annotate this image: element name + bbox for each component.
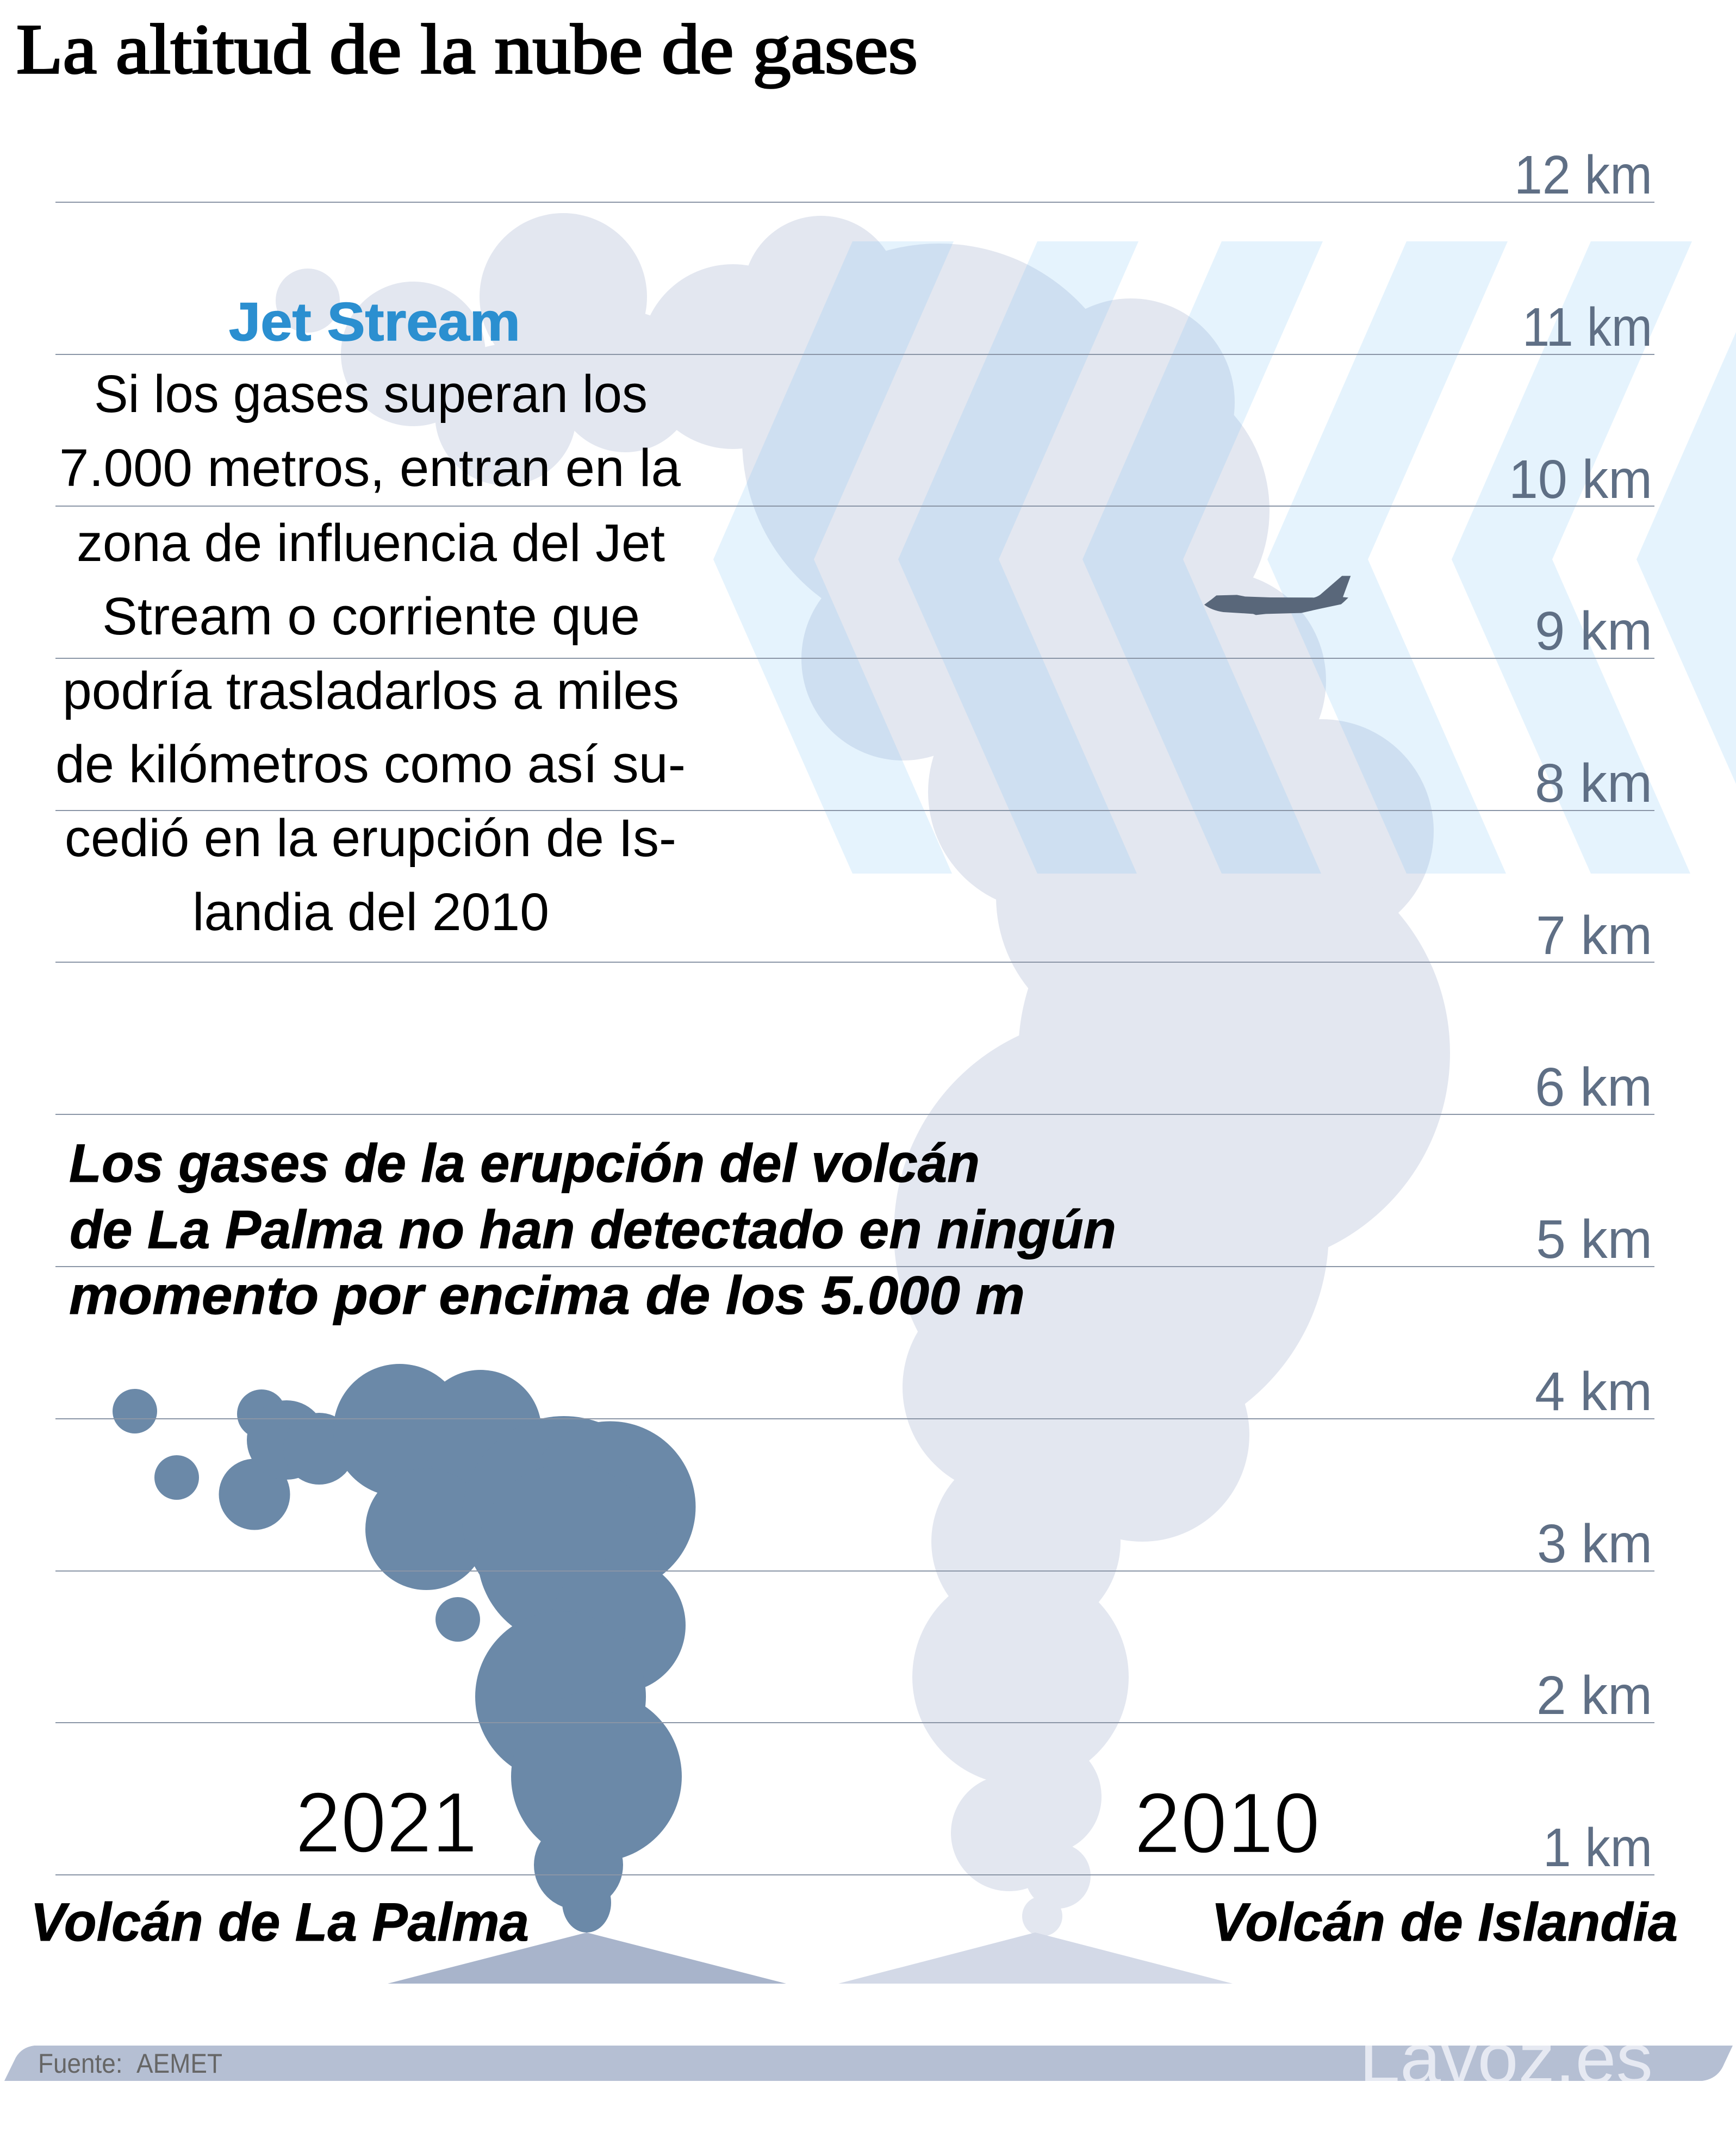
callout: La Palma gases: momento por encima de los 5.000 m xyxy=(69,1265,1025,1325)
year label 2010: 2010 xyxy=(1134,1775,1320,1871)
2021 La Palma volcano gas cloud xyxy=(113,1364,696,1932)
altitude scale labels: 1 km xyxy=(1543,1817,1652,1878)
year label 2021: 2021 xyxy=(295,1775,477,1871)
altitude scale labels: 12 km xyxy=(1514,145,1652,205)
logo text: Lavoz.es xyxy=(1359,2018,1653,2098)
footer bar xyxy=(4,2046,1733,2081)
volcano: Islandia xyxy=(838,1932,1233,1984)
callout: La Palma gases xyxy=(69,1133,1116,1325)
altitude scale labels: 6 km xyxy=(1535,1057,1652,1118)
altitude scale labels: 10 km xyxy=(1509,449,1652,510)
altitude scale labels: 9 km xyxy=(1535,601,1652,662)
2010 Iceland volcano gas cloud xyxy=(276,213,1450,1936)
label: Volcán de Islandia: Volcán de Islandia xyxy=(1211,1892,1678,1952)
altitude scale labels: 7 km xyxy=(1536,905,1652,966)
altitude scale labels: 5 km xyxy=(1536,1209,1652,1270)
altitude scale labels: 8 km xyxy=(1535,753,1652,814)
title: La altitud de la nube de gases xyxy=(16,10,918,89)
volcano: La Palma xyxy=(388,1932,786,1984)
text block: Jet Stream explanation: landia del 2010 xyxy=(192,882,549,942)
source text: Fuente: AEMET xyxy=(38,2048,222,2079)
icon: airplane xyxy=(1204,576,1351,615)
text block: Jet Stream explanation: podría trasladarlos a miles xyxy=(63,661,679,720)
text block: Jet Stream explanation: Stream o corriente que xyxy=(102,587,640,646)
text block: Jet Stream explanation: 7.000 metros, entran en la xyxy=(59,438,681,497)
jet stream chevrons xyxy=(713,241,1736,874)
text block: Jet Stream explanation: Si los gases superan los xyxy=(94,364,648,423)
label: Volcán de La Palma: Volcán de La Palma xyxy=(30,1892,529,1952)
text block: Jet Stream explanation: de kilómetros como así su- xyxy=(55,734,686,794)
altitude grid lines xyxy=(55,202,1654,1875)
callout: La Palma gases: de La Palma no han detectado en ningún xyxy=(70,1199,1116,1260)
text block: Jet Stream explanation xyxy=(55,364,686,942)
altitude scale labels: 11 km xyxy=(1522,297,1652,358)
altitude scale labels: 2 km xyxy=(1536,1665,1652,1726)
text block: Jet Stream explanation: zona de influencia del Jet xyxy=(77,513,665,572)
callout: La Palma gases: Los gases de la erupción del volcán xyxy=(69,1133,980,1193)
text block: Jet Stream explanation: cedió en la erupción de Is- xyxy=(65,808,676,868)
heading: Jet Stream: Jet Stream xyxy=(229,291,520,352)
altitude scale labels: 4 km xyxy=(1535,1361,1652,1422)
altitude scale labels xyxy=(1509,145,1652,1878)
altitude scale labels: 3 km xyxy=(1537,1513,1652,1574)
